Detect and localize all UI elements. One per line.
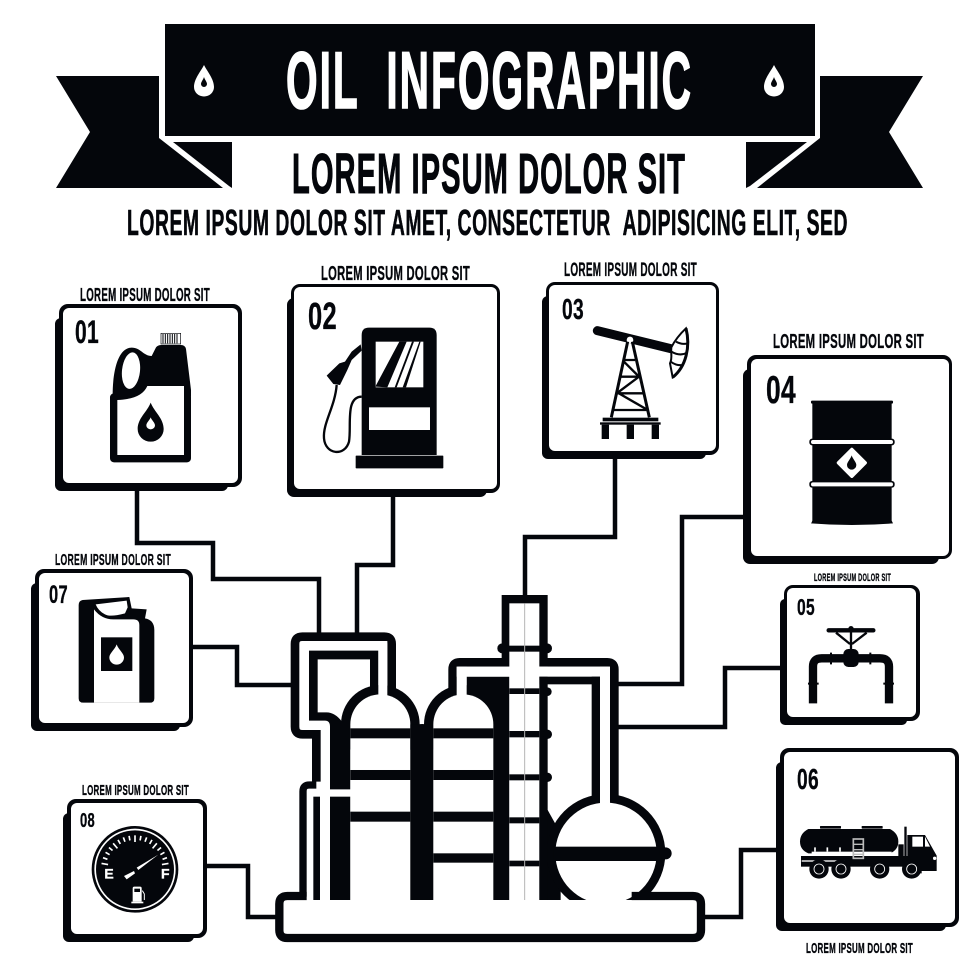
icon: oil jug <box>110 333 191 462</box>
ribbon right fold <box>746 142 807 188</box>
panel 04: oil barrel <box>743 330 952 564</box>
connector 07 <box>191 647 292 685</box>
connector 01 <box>137 489 319 636</box>
icon: tanker truck <box>800 826 937 879</box>
icon: fuel gauge <box>92 826 178 913</box>
refinery left tower <box>309 641 433 900</box>
banner panel <box>165 24 815 136</box>
number 03: 03 <box>562 294 584 326</box>
connector 04 <box>617 517 745 684</box>
label 05: LOREM IPSUM DOLOR SIT <box>814 572 891 584</box>
panel 05: pipeline valve <box>780 572 920 725</box>
icon: pipeline valve <box>808 626 894 703</box>
connector 03 <box>525 457 615 597</box>
connector lines <box>137 457 782 917</box>
gauge F: F <box>161 866 170 882</box>
connector 06 <box>703 850 778 917</box>
panel 01: oil jug <box>55 285 242 491</box>
refinery base platform <box>279 896 701 938</box>
label 02: LOREM IPSUM DOLOR SIT <box>321 263 470 285</box>
ribbon banner with title <box>56 24 923 188</box>
icon: right white drop <box>764 65 784 96</box>
connector 02 <box>357 495 393 636</box>
panel 07: jerry can <box>31 552 193 731</box>
refinery upper pipe outline <box>453 662 614 800</box>
number 06: 06 <box>797 764 819 796</box>
connector 08 <box>205 866 277 917</box>
ribbon right tail <box>757 76 923 188</box>
icon: pumpjack <box>597 328 688 439</box>
panel 02: fuel pump <box>287 263 500 497</box>
icon: fuel pump <box>324 328 443 468</box>
number 05: 05 <box>797 594 815 620</box>
gauge fuel pump <box>131 887 144 903</box>
label 08: LOREM IPSUM DOLOR SIT <box>82 783 189 799</box>
panel 06: tanker truck <box>776 748 959 957</box>
number 01: 01 <box>75 314 99 350</box>
label 03: LOREM IPSUM DOLOR SIT <box>564 260 697 281</box>
number 08: 08 <box>80 810 95 832</box>
number 02: 02 <box>308 296 337 338</box>
label 01: LOREM IPSUM DOLOR SIT <box>80 285 210 305</box>
number 04: 04 <box>766 369 796 412</box>
refinery central illustration <box>279 595 701 938</box>
gauge needle <box>124 855 158 879</box>
panel 03: pumpjack <box>542 260 719 459</box>
refinery sphere tank <box>539 667 672 913</box>
label 07: LOREM IPSUM DOLOR SIT <box>55 552 171 569</box>
ribbon left tail <box>56 76 223 188</box>
icon: left white drop <box>194 65 214 96</box>
connector 05 <box>617 668 782 727</box>
icon: oil barrel <box>809 401 895 525</box>
refinery left pipe outline <box>295 637 392 897</box>
number 07: 07 <box>49 581 68 609</box>
truck wheels <box>809 859 921 879</box>
refinery central column <box>497 595 552 900</box>
gauge ticks <box>102 835 168 865</box>
icon: jerry can <box>79 597 154 703</box>
gauge E: E <box>104 866 114 882</box>
refinery right tower <box>410 667 610 900</box>
panel 08: fuel gauge <box>63 783 207 942</box>
ribbon left fold <box>173 142 232 188</box>
